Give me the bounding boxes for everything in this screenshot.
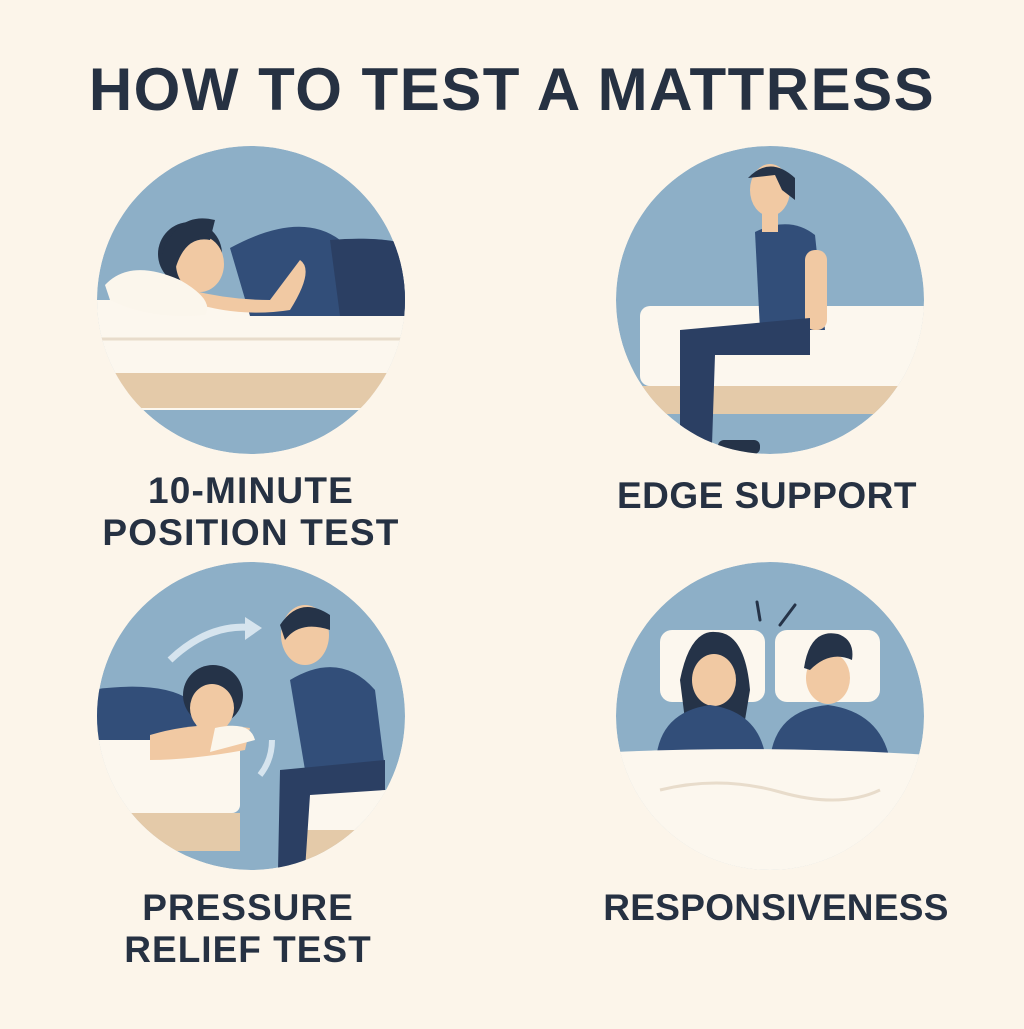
title: HOW TO TEST A MATTRESS — [89, 56, 935, 123]
panel: responsiveness illustration — [615, 562, 930, 880]
label: 10-minute position test: POSITION TEST — [102, 512, 400, 553]
label: pressure relief test: RELIEF TEST — [124, 929, 372, 970]
icon: motion lines — [757, 602, 795, 625]
figure: sitting person — [290, 667, 385, 770]
label: 10-minute position test: 10-MINUTE — [148, 470, 354, 511]
figure: woman — [680, 632, 750, 720]
blanket — [620, 749, 919, 870]
figure: sleeping woman — [105, 218, 410, 316]
label: 10-minute position test — [102, 470, 400, 553]
panel: edge support illustration — [616, 146, 940, 454]
arrows — [170, 627, 255, 660]
label: responsiveness: RESPONSIVENESS — [603, 887, 949, 928]
panel: 10-minute position test illustration — [90, 146, 420, 454]
figure: man — [806, 652, 850, 704]
figure: lying person — [90, 687, 200, 740]
label: pressure relief test: PRESSURE — [142, 887, 354, 928]
figure: seated man — [680, 164, 827, 454]
label: pressure relief test — [124, 887, 372, 970]
panel: pressure relief test illustration — [90, 562, 405, 870]
label: edge support: EDGE SUPPORT — [617, 475, 917, 516]
